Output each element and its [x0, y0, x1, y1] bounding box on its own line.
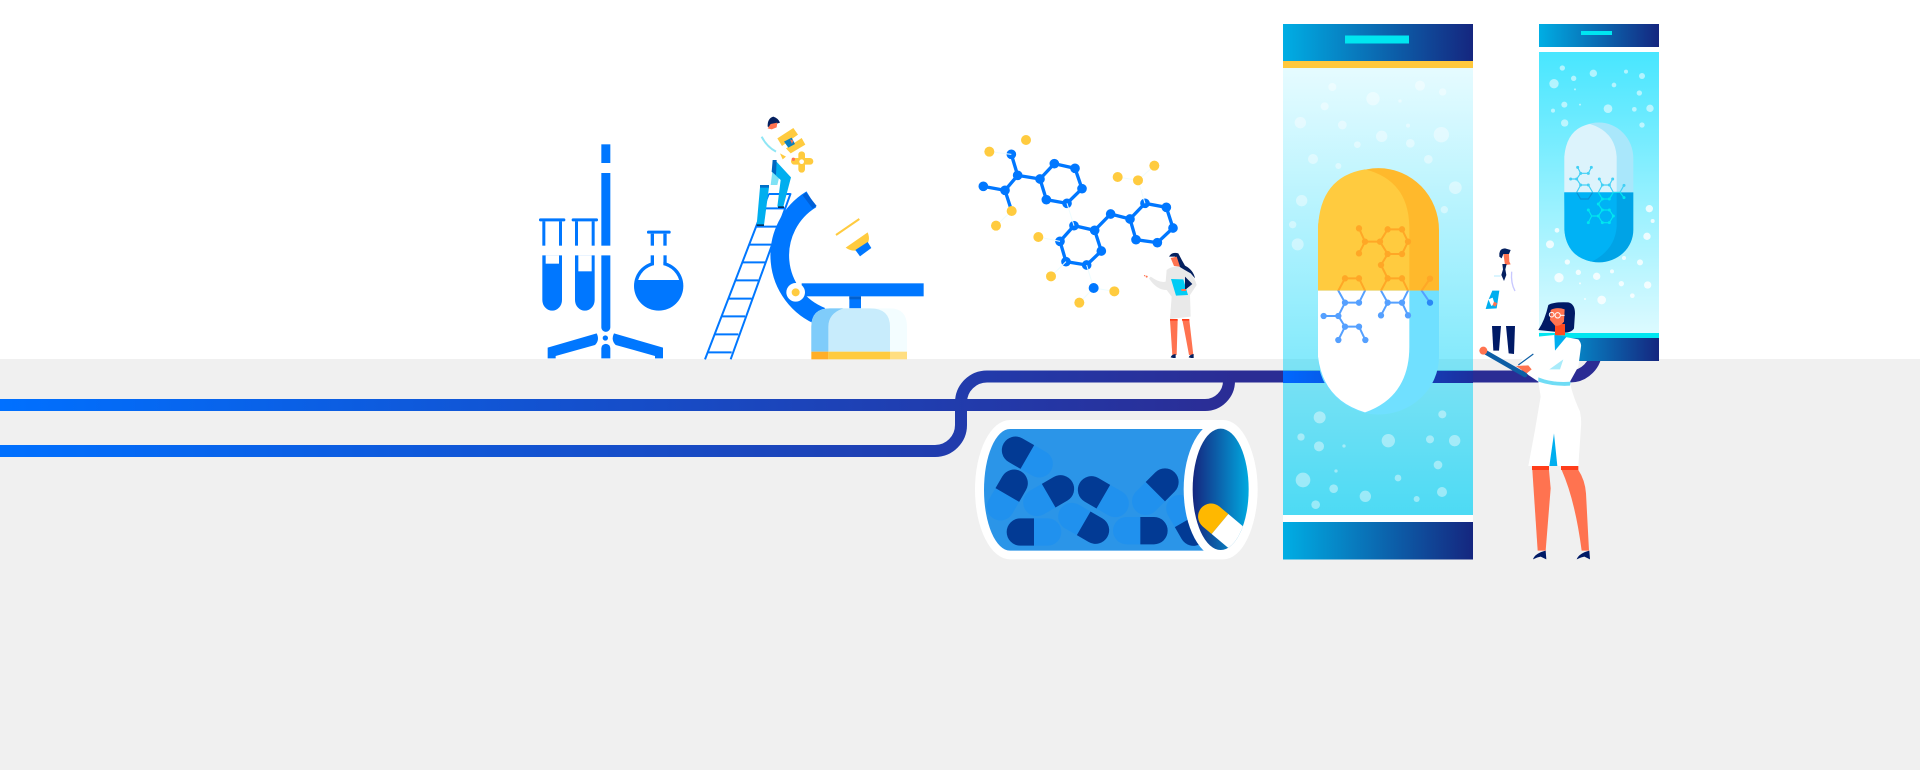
- large tank: [1283, 24, 1473, 560]
- small capsule molecule: [1571, 167, 1624, 199]
- small tank bottom cap: [1539, 338, 1659, 361]
- small tank top cap: [1539, 24, 1659, 47]
- tablet and pen: [1518, 354, 1533, 365]
- cylinder opening: [1184, 428, 1258, 551]
- scientist man: [1486, 248, 1515, 354]
- small tank bubbles: [1549, 65, 1654, 128]
- molecule and yellow atoms: [983, 135, 1173, 308]
- microscope base: [811, 308, 907, 359]
- tank top cap: [1283, 24, 1473, 61]
- scientist woman with clipboard: [1144, 253, 1197, 358]
- hair and face: [1538, 302, 1575, 333]
- flask: [634, 231, 683, 311]
- capsule molecule: [1337, 225, 1433, 291]
- scientist woman with tablet: [1479, 302, 1590, 559]
- tank bottom cap: [1283, 522, 1473, 560]
- pivot: [786, 283, 805, 302]
- bubbles: [1289, 81, 1462, 250]
- small capsule: [1564, 122, 1633, 262]
- floor: [0, 359, 1920, 770]
- small tank: [1539, 24, 1659, 361]
- microscope stage: [802, 283, 924, 296]
- lab glassware: [539, 144, 683, 358]
- microscope and ladder: [705, 192, 924, 359]
- large capsule: [1318, 168, 1439, 414]
- microscope arm: [780, 199, 822, 317]
- objective lens: [836, 219, 871, 256]
- ladder: [705, 193, 791, 359]
- test tube 1: [539, 218, 565, 311]
- capsule-filled glass cylinder: [975, 420, 1259, 560]
- scientist on ladder: [757, 117, 810, 226]
- legs: [1532, 470, 1589, 551]
- pipes: [0, 350, 1596, 451]
- tumbling capsules: [987, 436, 1199, 546]
- test tube 2: [572, 218, 598, 311]
- stand: [548, 144, 663, 358]
- lab coat: [1518, 335, 1581, 466]
